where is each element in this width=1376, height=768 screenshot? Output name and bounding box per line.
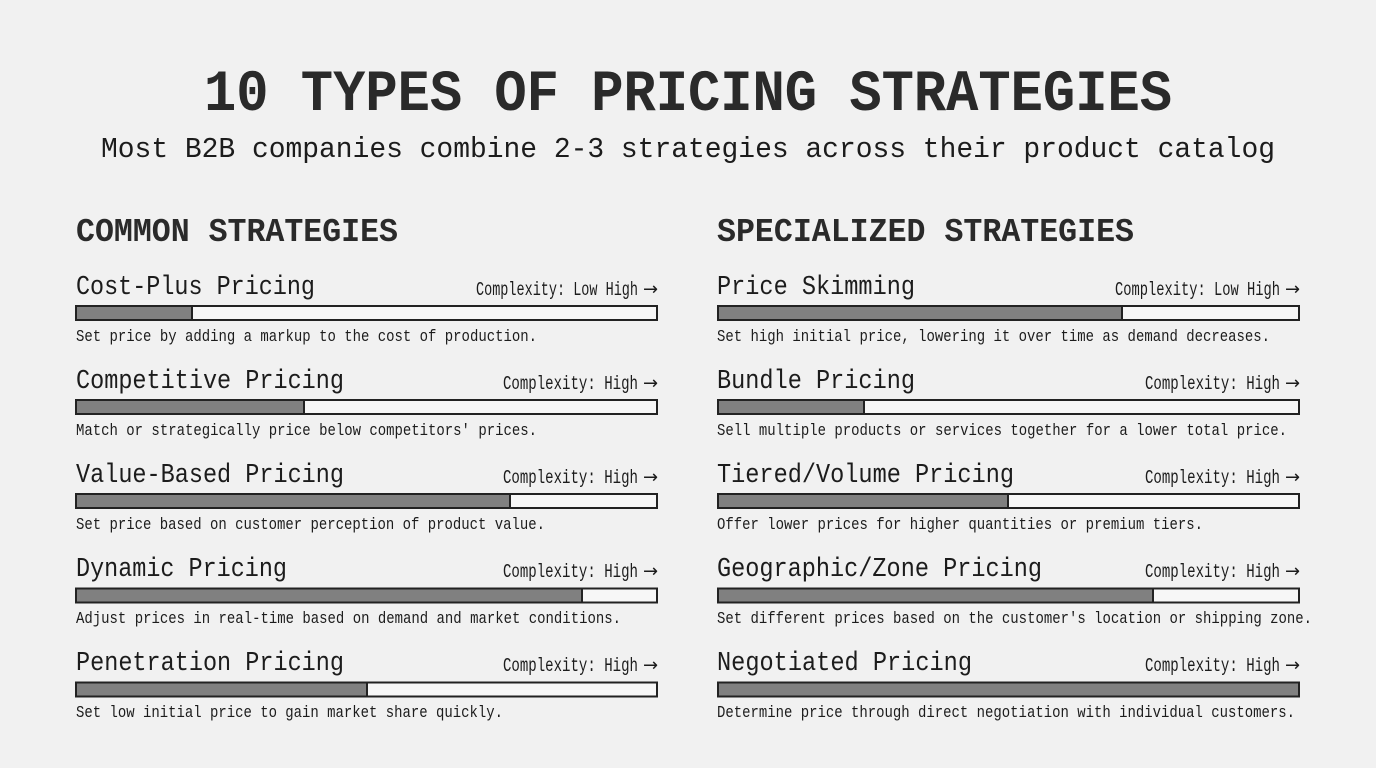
strategy: cost-plus pricing [76, 273, 658, 347]
strategy: dynamic pricing [76, 555, 658, 629]
strategy: price skimming [717, 273, 1300, 347]
strategy: price skimming: Set high initial price, lowering it over time as demand decreases. [717, 328, 1270, 347]
strategy: negotiated pricing [717, 649, 1300, 723]
heading: specialized strategies: SPECIALIZED STRATEGIES [717, 214, 1134, 251]
title: 10 TYPES OF PRICING STRATEGIES [204, 63, 1172, 128]
strategy: negotiated pricing: Negotiated Pricing [717, 649, 972, 679]
strategy: value-based pricing: Complexity: High [503, 467, 638, 489]
strategy: geographic/zone pricing [717, 555, 1312, 629]
strategy: bundle pricing: Complexity: High [1145, 373, 1280, 395]
strategy: competitive pricing: → [643, 373, 658, 394]
strategy: cost-plus pricing: Complexity: Low High [476, 279, 638, 301]
strategy: geographic/zone pricing: Geographic/Zone Pricing [717, 555, 1042, 585]
strategy: price skimming: Price Skimming [717, 273, 915, 303]
strategy: penetration pricing: Penetration Pricing [76, 649, 344, 679]
strategy: value-based pricing: → [643, 467, 658, 488]
strategy: tiered/volume pricing: Tiered/Volume Pricing [717, 461, 1014, 491]
panel: common strategies [76, 214, 658, 723]
strategy: penetration pricing: Complexity: High [503, 655, 638, 677]
subtitle: Most B2B companies combine 2-3 strategies across their product catalog [101, 133, 1275, 166]
strategy: cost-plus pricing: Set price by adding a markup to the cost of production. [76, 328, 537, 347]
strategy: bundle pricing: Bundle Pricing [717, 367, 915, 397]
strategy: negotiated pricing: Complexity: High [1145, 655, 1280, 677]
strategy: bundle pricing [717, 367, 1300, 441]
strategy: competitive pricing [76, 367, 658, 441]
strategy: penetration pricing: Set low initial price to gain market share quickly. [76, 704, 503, 723]
strategy: price skimming: Complexity: Low High [1115, 279, 1280, 301]
strategy: negotiated pricing: → [1285, 655, 1300, 676]
strategy: tiered/volume pricing: Offer lower prices for higher quantities or premium tiers. [717, 516, 1203, 535]
strategy: dynamic pricing: Adjust prices in real-time based on demand and market conditions. [76, 610, 621, 629]
strategy: geographic/zone pricing: Complexity: High [1145, 561, 1280, 583]
strategy: penetration pricing [76, 649, 658, 723]
strategy: dynamic pricing: Dynamic Pricing [76, 555, 287, 585]
strategy: competitive pricing: Match or strategically price below competitors' prices. [76, 422, 537, 441]
strategy: cost-plus pricing: → [643, 279, 658, 300]
strategy: tiered/volume pricing [717, 461, 1300, 535]
strategy: tiered/volume pricing: Complexity: High [1145, 467, 1280, 489]
strategy: competitive pricing: Complexity: High [503, 373, 638, 395]
strategy: price skimming: → [1285, 279, 1300, 300]
strategy: bundle pricing: → [1285, 373, 1300, 394]
strategy: penetration pricing: → [643, 655, 658, 676]
strategy: cost-plus pricing: Cost-Plus Pricing [76, 273, 315, 303]
strategy: dynamic pricing: → [643, 561, 658, 582]
strategy: value-based pricing [76, 461, 658, 535]
panel: specialized strategies [717, 214, 1312, 723]
strategy: tiered/volume pricing: → [1285, 467, 1300, 488]
strategy: dynamic pricing: Complexity: High [503, 561, 638, 583]
strategy: value-based pricing: Value-Based Pricing [76, 461, 344, 491]
strategy: competitive pricing: Competitive Pricing [76, 367, 344, 397]
heading: common strategies: COMMON STRATEGIES [76, 214, 398, 251]
strategy: geographic/zone pricing: → [1285, 561, 1300, 582]
strategy: value-based pricing: Set price based on customer perception of product value. [76, 516, 545, 535]
